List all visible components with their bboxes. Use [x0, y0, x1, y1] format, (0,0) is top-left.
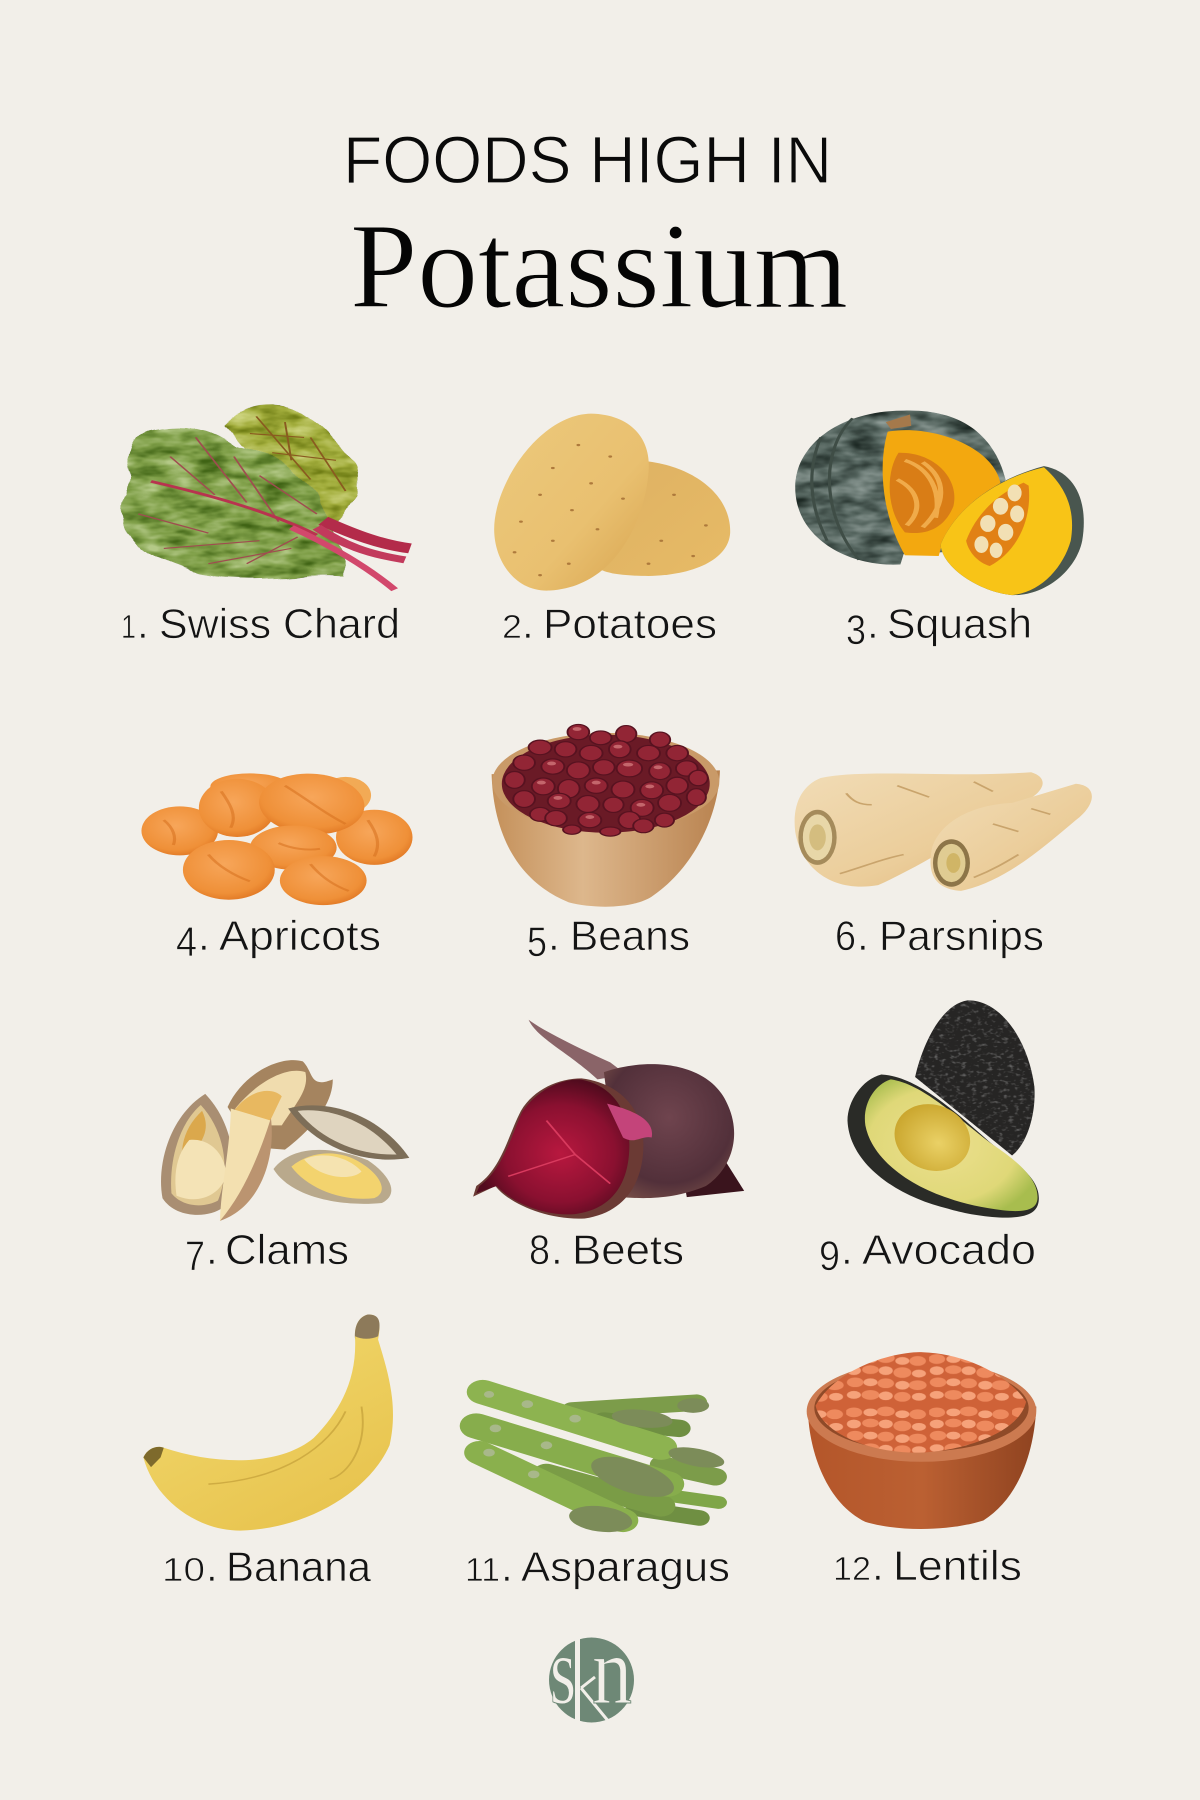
label: 11. asparagus: Asparagus — [521, 1543, 730, 1590]
label: 10. banana: Banana — [226, 1543, 372, 1590]
label: 11. asparagus: . — [501, 1543, 513, 1590]
label: 3. squash: . — [867, 600, 879, 647]
label: 7. clams — [185, 1226, 349, 1279]
panel: parsnips — [795, 772, 1092, 959]
label: 5. beans — [527, 912, 690, 965]
icon: squash — [795, 410, 1084, 595]
logo: skn monogram: n — [592, 1617, 632, 1724]
label: 9. avocado: Avocado — [862, 1226, 1036, 1273]
heading: foods high in: FOODS HIGH IN — [343, 123, 832, 198]
label: 7. clams: 7 — [185, 1232, 205, 1279]
label: 8. beets — [529, 1226, 684, 1273]
label: 3. squash — [846, 600, 1032, 653]
label: 3. squash: Squash — [887, 600, 1032, 647]
label: 9. avocado — [819, 1226, 1036, 1279]
label: 1. swiss chard: 1 — [121, 608, 136, 645]
icon: potatoes — [494, 414, 730, 591]
label: 2. potatoes: 2 — [502, 608, 522, 645]
label: 12. lentils: Lentils — [893, 1542, 1022, 1589]
logo: skn monogram — [549, 1617, 634, 1726]
panel: avocado — [819, 1000, 1039, 1279]
label: 3. squash: 3 — [846, 606, 866, 653]
label: 4. apricots: Apricots — [219, 912, 381, 959]
icon: asparagus — [476, 1391, 727, 1536]
label: 7. clams: . — [206, 1226, 218, 1273]
icon: beets — [473, 1020, 744, 1219]
panel: beets — [473, 1020, 744, 1273]
icon: banana — [143, 1314, 393, 1531]
panel: beans — [492, 724, 720, 965]
label: 4. apricots: . — [198, 912, 210, 959]
label: 9. avocado: . — [841, 1226, 853, 1273]
icon: swiss chard — [124, 406, 410, 590]
label: 1. swiss chard: Swiss Chard — [159, 600, 400, 647]
label: 2. potatoes: . — [522, 600, 534, 647]
label: 7. clams: Clams — [225, 1226, 349, 1273]
label: 12. lentils: . — [872, 1542, 884, 1589]
panel: banana — [143, 1314, 393, 1590]
label: 8. beets: . — [551, 1226, 563, 1273]
label: 6. parsnips: . — [857, 912, 869, 959]
title — [343, 123, 848, 334]
label: 6. parsnips: 6 — [835, 912, 856, 959]
label: 5. beans: . — [548, 912, 560, 959]
label: 10. banana: 10 — [162, 1551, 205, 1588]
label: 1. swiss chard: . — [137, 600, 149, 647]
icon: clams — [161, 1060, 409, 1221]
panel: clams — [161, 1060, 409, 1279]
heading: potassium: Potassium — [350, 199, 848, 334]
logo: skn monogram: s — [550, 1617, 576, 1724]
label: 8. beets: Beets — [572, 1226, 684, 1273]
label: 9. avocado: 9 — [819, 1232, 840, 1279]
label: 11. asparagus: 11 — [465, 1551, 500, 1588]
label: 10. banana: . — [206, 1543, 218, 1590]
label: 2. potatoes: Potatoes — [543, 600, 717, 647]
label: 4. apricots: 4 — [176, 918, 197, 965]
icon: bowl of beans — [492, 724, 720, 907]
panel: potatoes — [494, 414, 730, 647]
panel: swiss chard — [121, 406, 410, 647]
icon: bowl of lentils — [807, 1352, 1036, 1529]
label: 6. parsnips: Parsnips — [879, 912, 1044, 959]
icon: avocado — [848, 1000, 1039, 1218]
panel: lentils — [807, 1352, 1036, 1589]
icon: parsnips — [795, 772, 1092, 891]
label: 5. beans: Beans — [570, 912, 690, 959]
label: 10. banana — [162, 1543, 372, 1590]
label: 12. lentils: 12 — [833, 1550, 871, 1587]
panel: squash — [795, 410, 1084, 653]
label: 4. apricots — [176, 912, 381, 965]
label: 12. lentils — [833, 1542, 1022, 1589]
label: 5. beans: 5 — [527, 918, 547, 965]
panel: asparagus — [465, 1391, 730, 1590]
label: 8. beets: 8 — [529, 1226, 550, 1273]
icon: apricots — [141, 762, 413, 905]
panel: apricots — [141, 762, 413, 965]
